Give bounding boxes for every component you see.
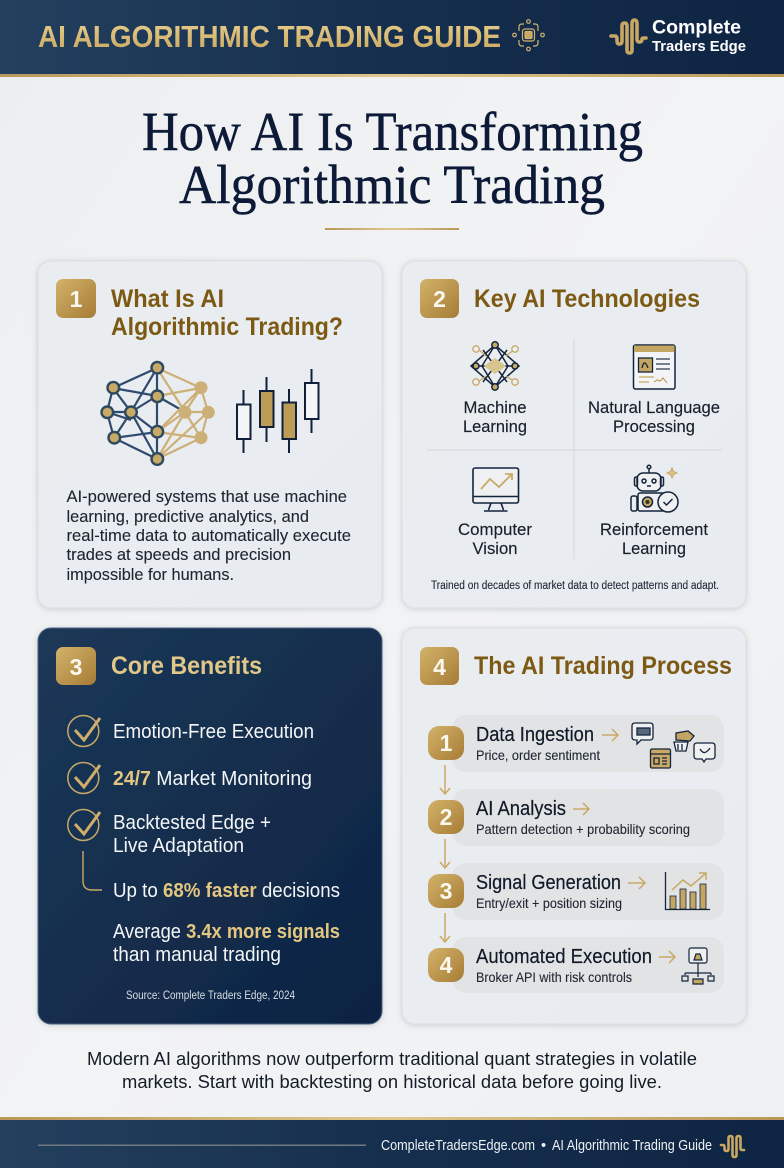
panel 3: core benefits [38,628,382,1024]
description text: real-time data to automatically execute [66,527,351,545]
label: machine learning [463,399,527,436]
step 1: data ingestion: 1 [440,730,453,756]
step 2: AI analysis: 2 [440,804,452,830]
benefit: backtested edge: Backtested Edge + [113,812,271,834]
stat: 3.4x more signals: than manual trading [113,944,281,966]
connector line [83,851,102,890]
step 3: signal generation: Entry/exit + position sizing [476,895,622,911]
step 4: automated execution: 4 [440,952,453,978]
footnote: training data: Trained on decades of market data to detect patterns and adapt. [431,580,719,592]
description text: trades at speeds and precision [66,546,291,564]
label: reinforcement learning: Reinforcement [600,521,708,539]
badge 2: 2 [433,286,446,312]
heading 2: Key AI Technologies [474,285,700,313]
step 1: data ingestion: Price, order sentiment [476,747,600,763]
heading 3: Core Benefits [111,652,262,680]
panel 4: the AI trading process [402,628,746,1024]
label: machine learning: Machine [464,399,526,417]
benefit: backtested edge [113,812,271,857]
bottom banner [0,1117,784,1168]
heading 1: Algorithmic Trading? [111,313,343,341]
heading 4: The AI Trading Process [474,652,732,680]
heading 1 [111,285,343,341]
label: natural language processing [588,399,720,436]
label: reinforcement learning [600,521,708,558]
description text: AI-powered systems that use machine [66,488,347,506]
panel 2: key AI technologies [402,261,746,608]
main title [142,101,643,215]
logo mark [611,20,646,53]
badge 4 [420,647,459,685]
badge 2 [420,279,459,318]
badge 4: 4 [433,654,446,680]
description text: learning, predictive analytics, and [66,508,309,526]
footer text: • [541,1138,546,1154]
icons: data sources [632,723,715,768]
badge 1: 1 [70,286,83,312]
arrow: step 2 to 3 [440,839,450,868]
icon: order routing [682,948,714,984]
step 2: AI analysis: AI Analysis [476,798,566,820]
badge 3 [56,647,96,685]
step 4: automated execution: Automated Execution [476,946,652,968]
label: computer vision: Computer [458,521,533,539]
stat: 3.4x more signals: Average 3.4x more signals [113,921,340,943]
benefit: emotion-free execution: Emotion-Free Execution [113,721,314,743]
label: computer vision [458,521,533,558]
logo wordmark: Complete [652,16,741,38]
icon: reinforcement learning robot [631,465,678,512]
benefit: 24/7 monitoring: 24/7 Market Monitoring [113,768,312,790]
main title: How AI Is Transforming [142,101,643,162]
badge 1 [56,279,96,318]
stat: 68% faster: Up to 68% faster decisions [113,880,340,902]
footer text [381,1138,712,1154]
arrow: step 1 to 2 [440,765,450,794]
closing statement: markets. Start with backtesting on historical data before going live. [122,1072,662,1092]
step 1: data ingestion: Data Ingestion [476,724,594,746]
footer text: CompleteTradersEdge.com [381,1138,535,1154]
panel 1: what is AI algorithmic trading [38,261,382,608]
label: machine learning: Learning [463,418,527,436]
check icons [68,716,100,840]
top banner [0,0,784,77]
icon: natural language processing [634,345,675,389]
badge 3: 3 [70,654,82,680]
icon: bar chart [666,872,710,910]
step 3: signal generation [428,863,724,920]
step 3: signal generation: 3 [440,878,452,904]
closing statement [87,1049,697,1092]
step 4: automated execution [428,937,724,993]
icon: computer vision [473,468,518,511]
stat: 3.4x more signals [113,921,340,966]
step 2: AI analysis: Pattern detection + probability scoring [476,821,690,837]
footer text: AI Algorithmic Trading Guide [552,1138,712,1154]
label: computer vision: Vision [472,540,518,558]
source note: Source: Complete Traders Edge, 2024 [126,990,296,1002]
logo wordmark [652,16,746,55]
heading 1: What Is AI [111,285,224,313]
step 3: signal generation: Signal Generation [476,872,621,894]
label: natural language processing: Natural Language [588,399,720,417]
icon: neural network [102,362,215,465]
icon: candlesticks [237,369,318,453]
label: natural language processing: Processing [613,418,695,436]
arrow: step 3 to 4 [440,913,450,942]
icon: machine learning [471,342,519,390]
banner title: AI ALGORITHMIC TRADING GUIDE [38,20,501,54]
step 1: data ingestion [428,715,724,772]
description text [66,488,351,584]
closing statement: Modern AI algorithms now outperform traditional quant strategies in volatile [87,1049,697,1069]
logo wordmark: Traders Edge [652,38,746,55]
main title: Algorithmic Trading [179,154,605,215]
label: reinforcement learning: Learning [622,540,686,558]
footer logo [721,1136,744,1157]
title divider [325,228,459,230]
benefit: backtested edge: Live Adaptation [113,835,244,857]
step 4: automated execution: Broker API with risk controls [476,969,632,985]
description text: impossible for humans. [66,566,234,584]
step 2: AI analysis [428,789,724,846]
icon: AI chip [513,20,544,51]
